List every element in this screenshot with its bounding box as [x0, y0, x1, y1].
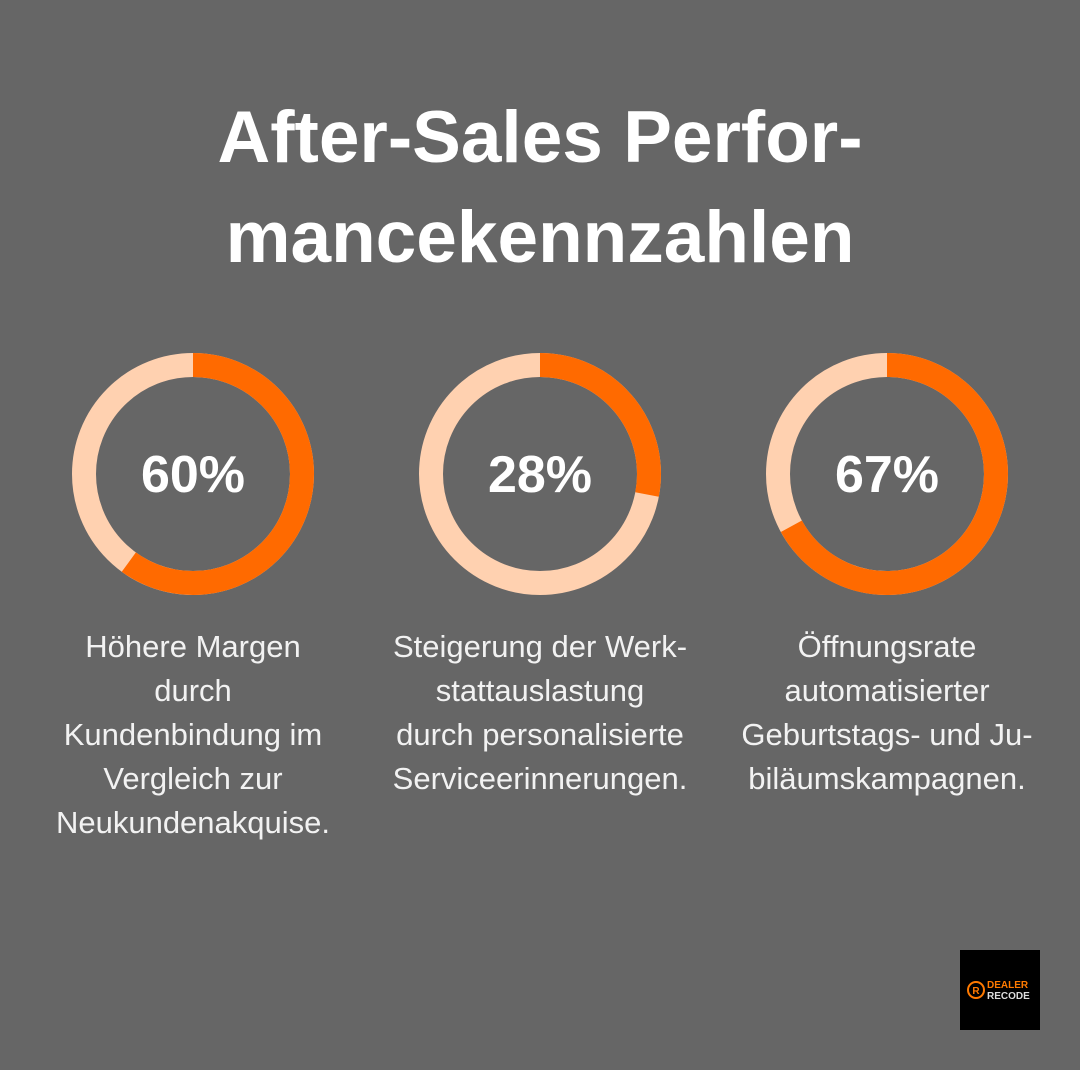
donut: 67%: 67%	[835, 446, 939, 504]
logo: RECODE	[987, 991, 1030, 1002]
title	[217, 97, 863, 278]
caption: 60%: durch	[154, 673, 232, 708]
caption: 67%	[741, 629, 1033, 796]
donut: 28%	[419, 353, 661, 595]
caption: 60%: Neukundenakquise.	[56, 805, 330, 840]
caption: 60%: Vergleich zur	[103, 761, 283, 796]
caption: 67%: biläumskampagnen.	[748, 761, 1026, 796]
caption: 60%	[56, 629, 330, 840]
caption: 67%: automatisierter	[784, 673, 990, 708]
caption: 28%: stattauslastung	[436, 673, 644, 708]
caption: 28%: Serviceerinnerungen.	[393, 761, 687, 796]
caption: 60%: Kundenbindung im	[64, 717, 322, 752]
caption: 60%: Höhere Margen	[85, 629, 301, 664]
logo: DEALER	[987, 980, 1029, 991]
caption: 28%	[393, 629, 687, 796]
title: mancekennzahlen	[226, 197, 854, 278]
caption: 67%: Geburtstags- und Ju-	[741, 717, 1033, 752]
caption: 67%: Öffnungsrate	[798, 629, 976, 664]
donut: 60%	[72, 353, 314, 595]
donut: 67%	[766, 353, 1008, 595]
logo: R	[972, 986, 980, 997]
logo	[960, 950, 1040, 1030]
caption: 28%: Steigerung der Werk-	[393, 629, 687, 664]
title: After-Sales Perfor-	[217, 97, 863, 178]
donut: 60%: 60%	[141, 446, 245, 504]
caption: 28%: durch personalisierte	[396, 717, 684, 752]
donut: 28%: 28%	[488, 446, 592, 504]
